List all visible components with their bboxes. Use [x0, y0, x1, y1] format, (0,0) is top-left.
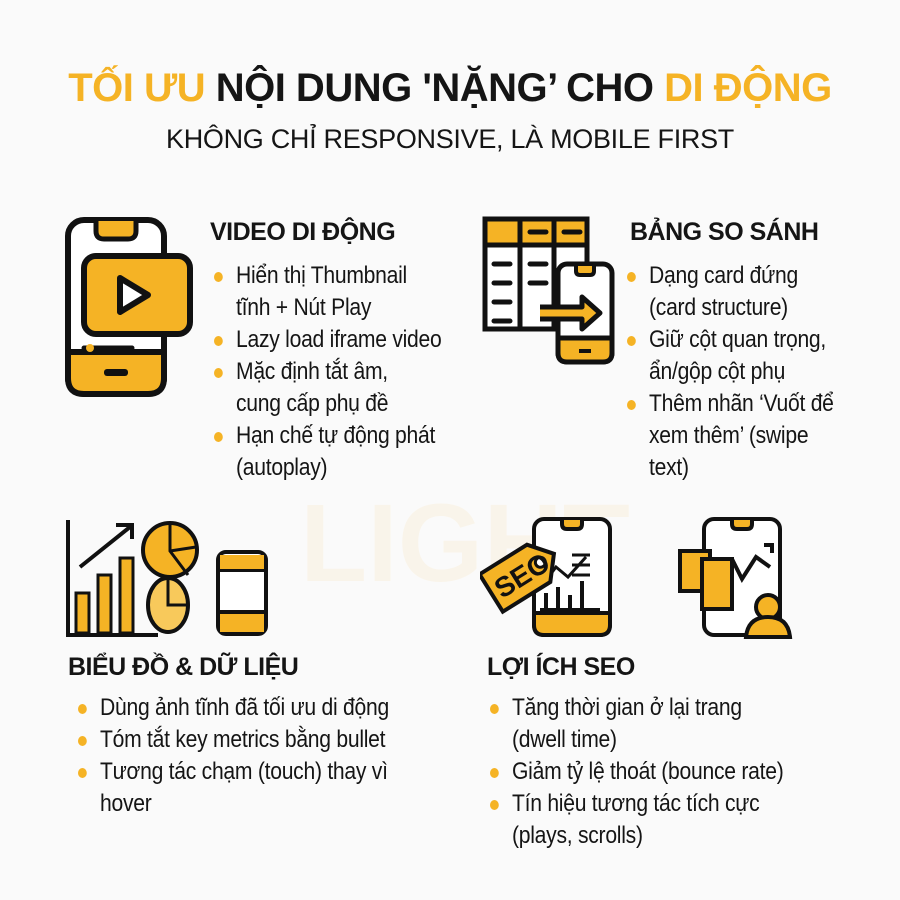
bullets: charts: hover — [100, 790, 152, 817]
bullets: table: Giữ cột quan trọng, — [649, 326, 826, 353]
subtitle: KHÔNG CHỈ RESPONSIVE, LÀ MOBILE FIRST — [166, 124, 734, 154]
bullets: SEO: Giảm tỷ lệ thoát (bounce rate) — [512, 758, 783, 785]
section heading: video: VIDEO DI ĐỘNG — [210, 218, 395, 246]
bullets: video: Mặc định tắt âm, — [236, 358, 388, 385]
bullets: table: xem thêm’ (swipe — [649, 422, 808, 449]
bullets: SEO: Tăng thời gian ở lại trang — [512, 694, 742, 721]
bullets: table: Thêm nhãn ‘Vuốt để — [649, 390, 834, 417]
title: TỐI ƯU NỘI DUNG 'NẶNG’ CHO DI ĐỘNG — [68, 66, 832, 110]
icon: charts — [66, 520, 268, 637]
icon: SEO phone — [480, 517, 612, 637]
section heading: SEO: LỢI ÍCH SEO — [487, 653, 635, 681]
bullets: video: (autoplay) — [236, 454, 327, 481]
bullets: charts: Dùng ảnh tĩnh đã tối ưu di động — [100, 694, 389, 721]
icon: table to mobile — [482, 216, 614, 364]
bullets: SEO — [490, 694, 783, 849]
watermark: LIGHT — [300, 482, 630, 605]
bullets: SEO: Tín hiệu tương tác tích cực — [512, 790, 759, 817]
bullets: table: text) — [649, 454, 689, 481]
bullets: SEO: (plays, scrolls) — [512, 822, 643, 849]
bullets: table — [627, 262, 834, 481]
bullets: table: Dạng card đứng — [649, 262, 798, 289]
bullets: table: ẩn/gộp cột phụ — [649, 358, 785, 385]
bullets: charts: Tương tác chạm (touch) thay vì — [100, 758, 388, 785]
bullets: video: Hiển thị Thumbnail — [236, 262, 407, 289]
icon: engagement — [678, 517, 792, 639]
icon: mobile video — [65, 217, 193, 397]
bullets: video: Lazy load iframe video — [236, 326, 442, 353]
section heading: charts: BIỂU ĐỒ & DỮ LIỆU — [68, 653, 298, 681]
bullets: charts: Tóm tắt key metrics bằng bullet — [100, 726, 385, 753]
bullets: video: Hạn chế tự động phát — [236, 422, 435, 449]
bullets: video — [214, 262, 442, 481]
bullets: charts — [78, 694, 389, 817]
section heading: table: BẢNG SO SÁNH — [630, 218, 818, 246]
icon: SEO phone: SEO — [489, 547, 555, 604]
bullets: video: tĩnh + Nút Play — [236, 294, 371, 321]
bullets: SEO: (dwell time) — [512, 726, 617, 753]
bullets: video: cung cấp phụ đề — [236, 390, 388, 417]
bullets: table: (card structure) — [649, 294, 788, 321]
